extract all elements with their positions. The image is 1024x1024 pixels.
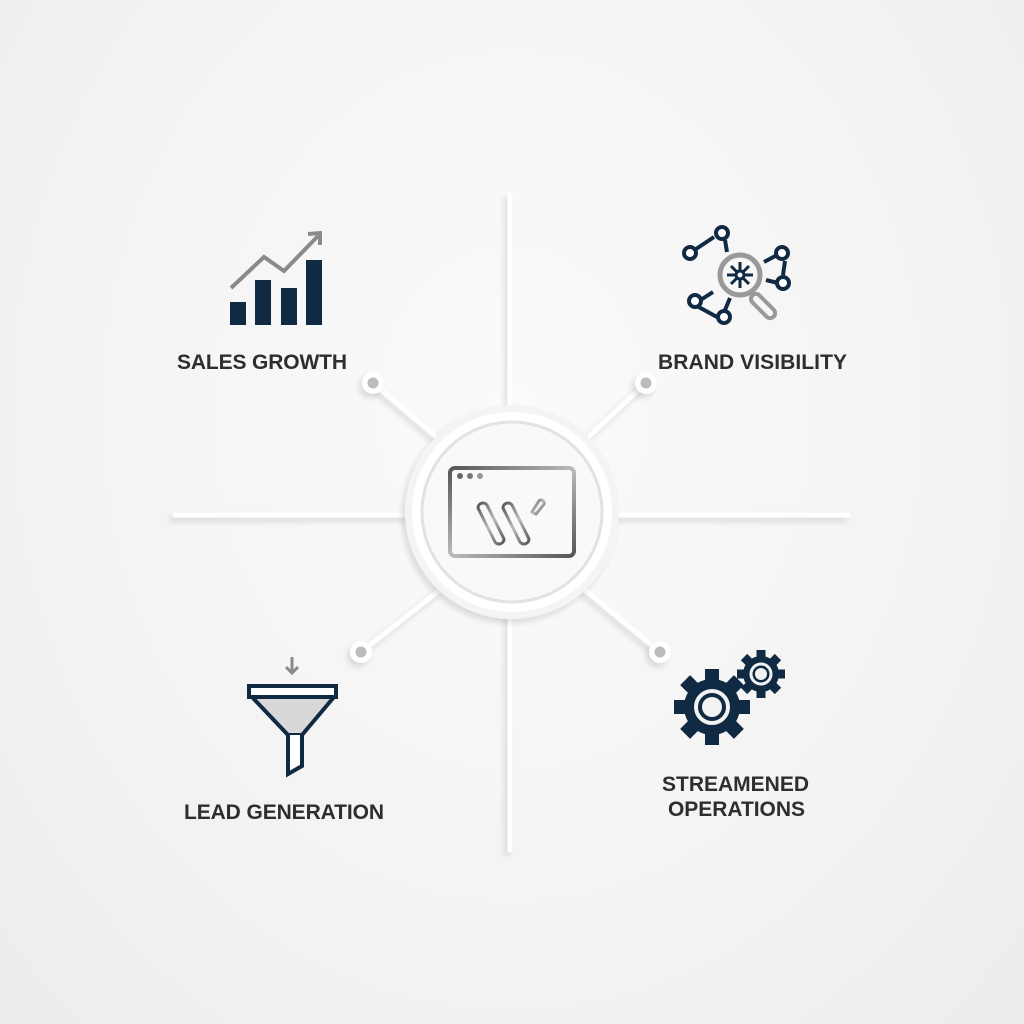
heading: brand visibility: BRAND VISIBILITY — [658, 351, 847, 374]
icon: browser window — [450, 468, 574, 556]
heading: streamlined operations: STREAMENED — [662, 773, 809, 796]
heading: streamlined operations — [662, 773, 809, 821]
heading: streamlined operations: OPERATIONS — [668, 798, 805, 821]
icon: gears — [658, 640, 795, 761]
central hub — [405, 405, 619, 619]
icon: sales growth chart — [230, 233, 322, 325]
icon: brand visibility network — [684, 227, 789, 323]
heading: sales growth: SALES GROWTH — [177, 351, 347, 374]
icon: lead generation funnel — [249, 657, 336, 774]
connector lines — [175, 195, 848, 850]
heading: lead generation: LEAD GENERATION — [184, 801, 384, 824]
connector nodes — [350, 372, 671, 663]
